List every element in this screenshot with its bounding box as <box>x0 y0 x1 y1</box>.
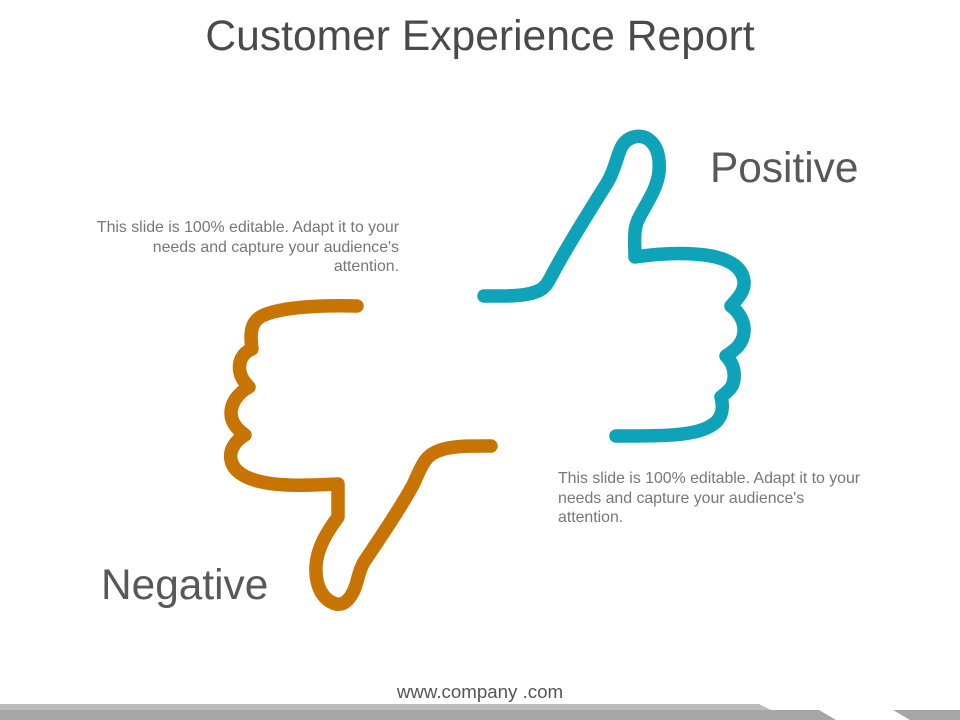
footer url: www.company .com <box>397 681 563 702</box>
text block: right description: attention. <box>558 509 623 526</box>
text block: right description: needs and capture your audience's <box>558 490 804 506</box>
text block: left description: needs and capture your audience's <box>153 238 399 256</box>
footer bars <box>0 704 960 720</box>
text block: right description: This slide is 100% editable. Adapt it to your <box>558 470 860 487</box>
text block: left description <box>97 219 399 275</box>
title: Customer Experience Report <box>205 12 755 60</box>
label: negative: Negative <box>101 561 268 608</box>
text block: left description: This slide is 100% editable. Adapt it to your <box>97 219 399 236</box>
text block: left description: attention. <box>334 258 399 275</box>
text block: right description <box>558 470 860 526</box>
label: positive: Positive <box>710 144 858 191</box>
